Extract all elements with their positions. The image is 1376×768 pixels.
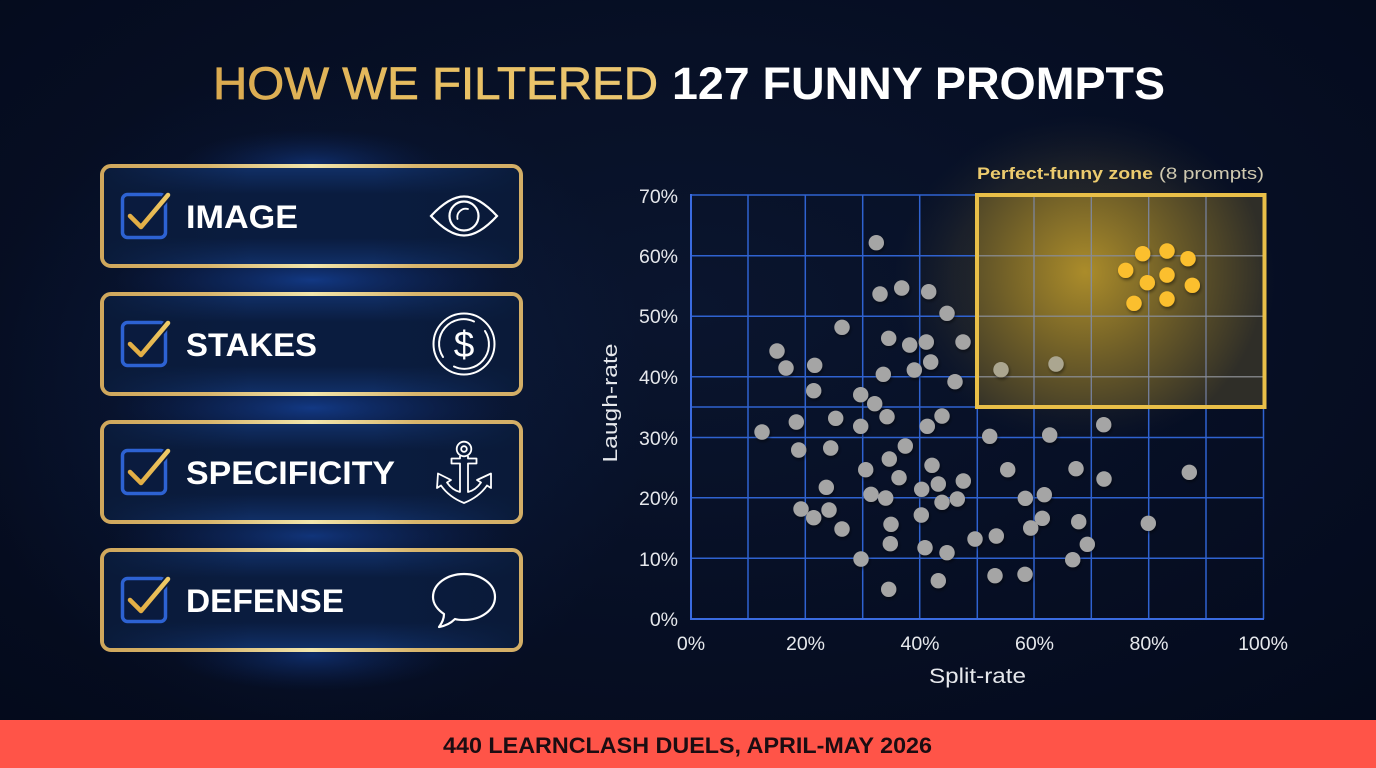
title: 127 FUNNY PROMPTS [672, 58, 1165, 109]
card: stakes [102, 294, 521, 394]
icon: dollar coin [434, 314, 494, 374]
zone halo [895, 115, 1275, 445]
label: IMAGE [186, 199, 298, 235]
y axis tick labels: 30% [639, 428, 678, 450]
y axis tick labels: 50% [639, 306, 678, 328]
gray data points [754, 235, 1197, 597]
y axis tick labels: 20% [639, 488, 678, 510]
label: SPECIFICITY [186, 455, 395, 491]
checkbox [122, 450, 168, 494]
gold data points [1118, 243, 1200, 311]
card: specificity [102, 422, 521, 522]
y axis tick labels: 10% [639, 549, 678, 571]
checkbox [122, 578, 168, 622]
y axis tick labels: 40% [639, 367, 678, 389]
zone label: Perfect-funny zone [977, 164, 1153, 183]
icon: anchor [437, 442, 491, 503]
card: image [102, 166, 521, 266]
icon: speech bubble [433, 574, 495, 627]
x axis tick labels: 40% [900, 633, 940, 655]
panel: filter checklist [102, 166, 521, 650]
y axis tick labels [639, 186, 678, 631]
title [213, 58, 1165, 109]
perfect-funny zone [977, 195, 1264, 407]
y axis tick labels: 0% [650, 609, 678, 631]
x axis tick labels: 80% [1129, 633, 1169, 655]
grid [690, 194, 1264, 620]
footer text: 440 LEARNCLASH DUELS, APRIL-MAY 2026 [443, 733, 932, 758]
x axis title: Split-rate [929, 665, 1026, 688]
x axis tick labels: 60% [1015, 633, 1054, 655]
zone label [977, 164, 1264, 183]
label: DEFENSE [186, 583, 344, 619]
x axis tick labels [677, 633, 1288, 655]
y axis tick labels: 60% [639, 246, 678, 268]
card: defense [102, 550, 521, 650]
title: HOW WE FILTERED [213, 58, 658, 109]
x axis tick labels: 20% [786, 633, 825, 655]
x axis tick labels: 0% [677, 633, 705, 655]
icon: dollar coin: $ [454, 324, 474, 365]
footer bar [0, 720, 1376, 768]
y axis tick labels: 70% [639, 186, 678, 208]
y axis title: Laugh-rate [600, 344, 622, 462]
label: STAKES [186, 327, 317, 363]
zone label: (8 prompts) [1159, 164, 1264, 183]
checkbox [122, 322, 168, 366]
blue glow behind cards [0, 60, 652, 740]
scatter chart [600, 115, 1288, 688]
checkbox [122, 194, 168, 238]
x axis tick labels: 100% [1238, 633, 1288, 655]
icon: eye [431, 196, 497, 236]
